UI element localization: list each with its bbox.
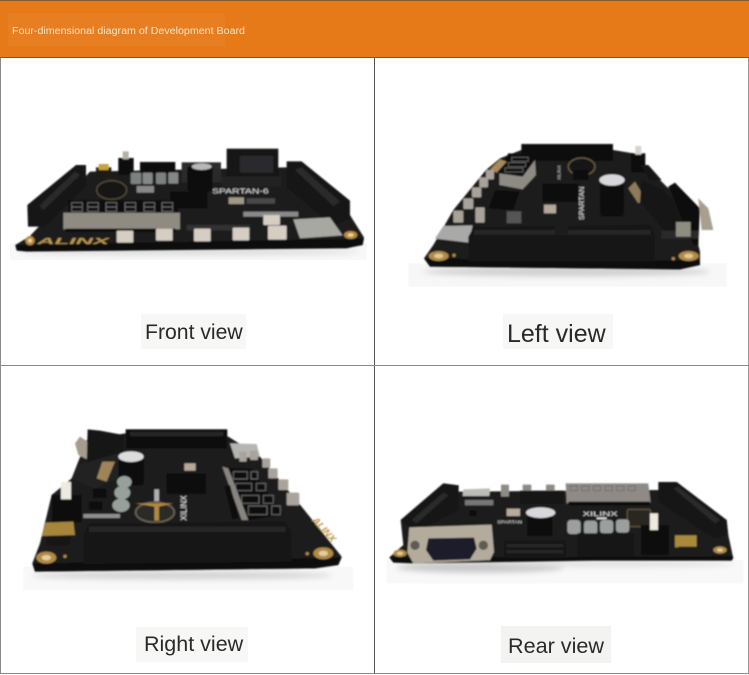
chips xyxy=(543,183,578,202)
seven segment display xyxy=(566,483,651,503)
right pin header xyxy=(287,161,350,227)
XILINX silkscreen: XILINX xyxy=(583,511,619,518)
push buttons xyxy=(501,485,555,497)
battery holder xyxy=(136,502,174,522)
push switch xyxy=(641,525,669,555)
main pin header xyxy=(468,225,655,262)
VGA connector xyxy=(75,437,95,462)
gold pins xyxy=(490,159,507,173)
push buttons xyxy=(453,170,494,223)
seven segment display xyxy=(68,200,178,214)
expansion sockets xyxy=(504,541,566,558)
push buttons xyxy=(117,215,287,243)
header banner xyxy=(0,0,749,58)
VGA connector xyxy=(227,149,278,179)
main pin header xyxy=(83,521,292,564)
capacitors xyxy=(112,476,132,512)
ALINX logo: ALINX xyxy=(35,236,112,246)
board surface xyxy=(424,150,700,269)
left pin header xyxy=(27,165,86,227)
socket xyxy=(640,165,662,180)
battery holder xyxy=(568,158,595,175)
push switch xyxy=(631,153,645,173)
label: right view: Right view xyxy=(144,632,244,656)
silkscreen: SPARTAN-6 xyxy=(212,186,269,195)
mounting holes xyxy=(429,251,449,261)
ALINX logo: ALINX xyxy=(309,515,339,546)
gold pins xyxy=(97,462,115,482)
small chips xyxy=(93,489,106,498)
seven segment display xyxy=(499,153,535,189)
micro SD card slot xyxy=(293,217,343,238)
label: rear view: Rear view xyxy=(508,633,604,658)
micro USB xyxy=(463,488,490,496)
panel: rear view xyxy=(387,482,743,663)
crystal xyxy=(184,463,196,471)
label: rear view xyxy=(501,626,611,663)
photo: left view of board xyxy=(408,144,727,287)
push switch xyxy=(52,495,82,523)
label: front view xyxy=(141,314,246,349)
silkscreen text: XILINX xyxy=(180,495,189,521)
FPGA chip xyxy=(170,192,207,208)
label: left view: Left view xyxy=(507,320,607,348)
board surface xyxy=(389,482,733,563)
push switch xyxy=(118,158,134,175)
photo: rear view of board xyxy=(387,482,743,583)
silkscreen: SPARTAN xyxy=(577,187,586,220)
label: front view: Front view xyxy=(145,321,243,344)
battery holder xyxy=(97,181,127,199)
USB power connector xyxy=(96,167,111,177)
capacitors xyxy=(567,519,629,535)
title: Four-dimensional diagram of Development Board xyxy=(12,25,245,37)
rear header xyxy=(521,144,613,161)
capacitors xyxy=(131,173,141,184)
panel: front view xyxy=(10,149,367,349)
SPARTAN silkscreen: SPARTAN xyxy=(497,519,522,525)
VGA connector xyxy=(407,525,494,563)
buzzer xyxy=(600,180,624,217)
push buttons xyxy=(239,451,299,505)
mounting holes xyxy=(393,550,407,557)
IC row xyxy=(520,491,563,504)
LED row xyxy=(224,485,239,519)
panel: left view xyxy=(408,144,727,349)
mounting holes xyxy=(36,552,56,564)
seven segment display xyxy=(223,467,283,521)
mini USB xyxy=(675,535,697,547)
photo: left view of board: XILINX xyxy=(557,164,562,180)
right pin header xyxy=(658,482,728,538)
buzzer xyxy=(527,511,553,536)
battery holder xyxy=(627,509,651,527)
micro SD xyxy=(435,225,473,243)
left pin header xyxy=(401,483,459,534)
buzzer xyxy=(182,162,221,182)
label: right view xyxy=(136,627,248,662)
VGA body xyxy=(640,180,685,237)
buzzer xyxy=(118,457,144,485)
photo: front view of board xyxy=(10,149,367,260)
FPGA chip xyxy=(167,473,206,494)
USB port xyxy=(230,443,260,458)
panel: right view xyxy=(23,429,353,662)
gold pins xyxy=(628,182,645,203)
digits xyxy=(505,157,528,172)
mini USB connector xyxy=(42,522,75,536)
mounting holes xyxy=(25,236,35,245)
board surface xyxy=(32,433,342,572)
expansion socket xyxy=(140,162,175,173)
rear header xyxy=(126,429,227,449)
photo: right view of board xyxy=(23,429,353,590)
